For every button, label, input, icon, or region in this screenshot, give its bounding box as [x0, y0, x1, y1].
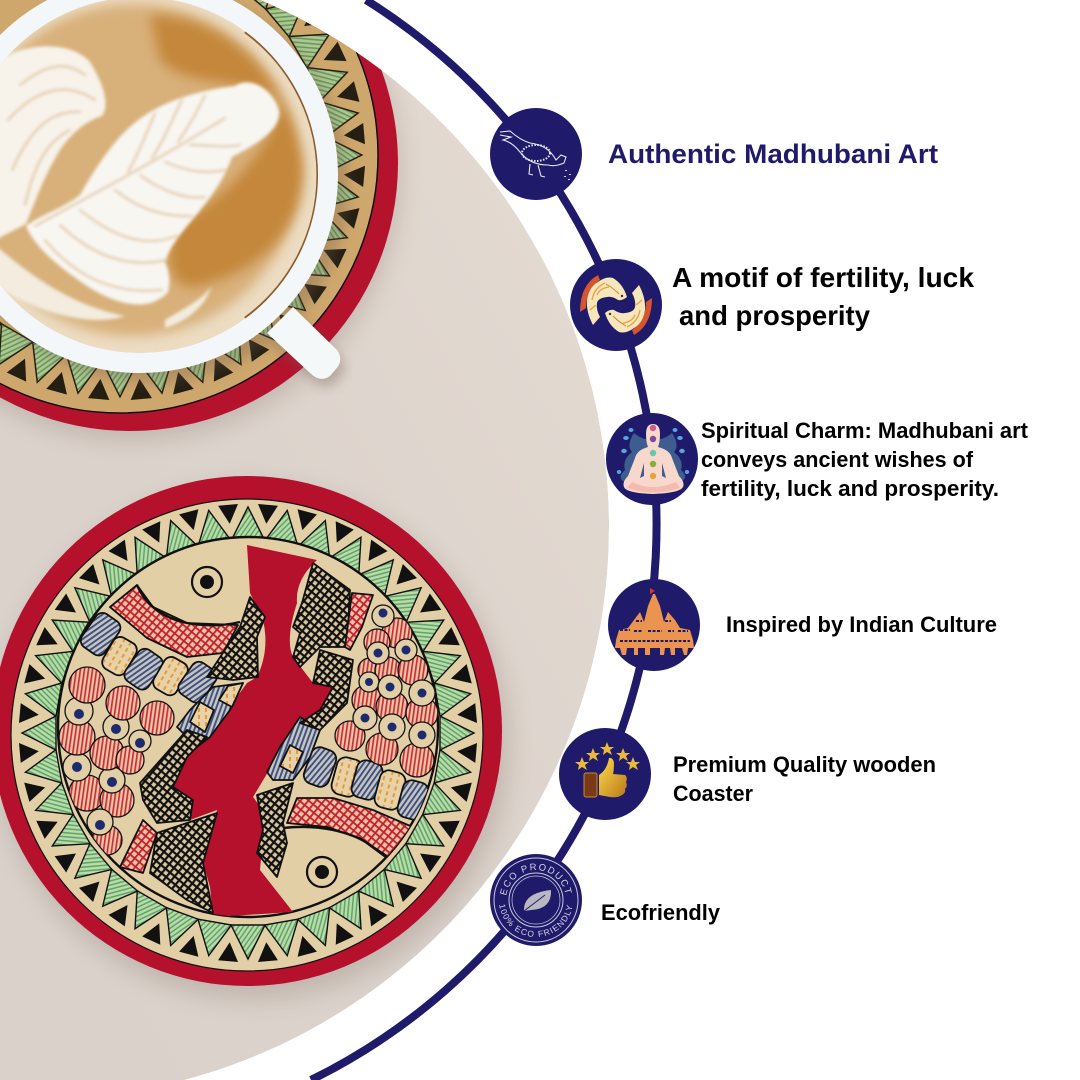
inner disc [58, 537, 438, 917]
fish: upper left [59, 567, 265, 913]
heading: Authentic Madhubani Art: Authentic Madhubani Art [608, 139, 938, 169]
text: premium quality [673, 752, 936, 806]
text: inspired by Indian culture: Inspired by Indian Culture [726, 612, 997, 637]
icon: peacock [490, 108, 582, 200]
icon: eco product badge [490, 854, 582, 946]
text: motif of fertility [672, 262, 974, 331]
text: premium quality: Premium Quality wooden [673, 752, 936, 777]
text: spiritual charm: Spiritual Charm: Madhubani art [701, 418, 1028, 443]
text: ecofriendly: Ecofriendly [601, 900, 720, 925]
text: premium quality: Coaster [673, 781, 753, 806]
icon: temple [608, 579, 700, 671]
main Madhubani fish coaster [0, 476, 509, 999]
panel: product photo circle [0, 0, 609, 1080]
icon: thumbs up with stars [559, 728, 651, 820]
text: motif of fertility: A motif of fertility, luck [672, 262, 974, 293]
text: motif of fertility: and prosperity [679, 300, 870, 331]
icon: meditating figure [606, 413, 698, 505]
text: spiritual charm [701, 418, 1028, 501]
text: spiritual charm: conveys ancient wishes of [701, 447, 973, 472]
fish: lower right [257, 563, 438, 887]
fish pair [59, 545, 438, 917]
white cup rim [0, 0, 338, 373]
icon: eco product badge: ECO PRODUCT [500, 864, 572, 895]
coaster with coffee cup [0, 0, 400, 440]
icon: eco product badge: 100% ECO FRIENDLY [499, 904, 572, 937]
coffee with latte art [0, 0, 318, 353]
red centre [173, 545, 333, 917]
text: spiritual charm: fertility, luck and prosperity. [701, 476, 999, 501]
triangle border [17, 502, 479, 964]
cup handle [267, 307, 345, 387]
icon: two fish [570, 259, 662, 351]
navy arc connector [311, 0, 657, 1080]
